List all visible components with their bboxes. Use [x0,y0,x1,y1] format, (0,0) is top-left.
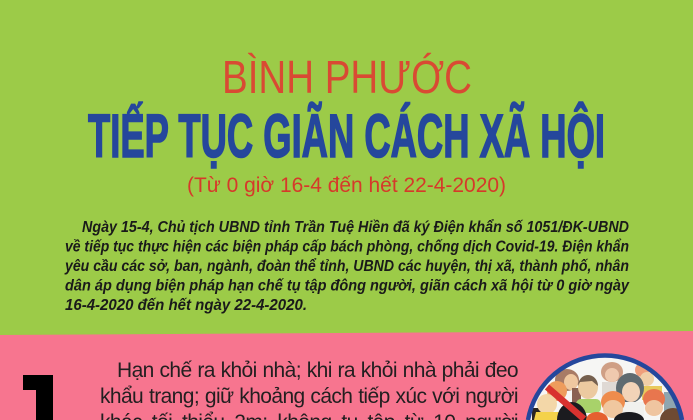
text block: intro paragraph: yêu cầu các sở, ban, ngành, đoàn thể tỉnh, UBND các huyện, thị xã, thành phố, nhân [64,258,629,275]
text block: intro paragraph [64,219,630,314]
text block: measure 1: khẩu trang; giữ khoảng cách tiếp xúc với người [100,385,518,408]
text block: measure 1: Hạn chế ra khỏi nhà; khi ra khỏi nhà phải đeo [117,359,518,382]
text block: intro paragraph: về tiếp tục thực hiện các biện pháp cấp bách phòng, chống dịch Covid-19. Điện khẩn [65,238,629,256]
subtitle: dates: (Từ 0 giờ 16-4 đến hết 22-4-2020) [187,174,506,197]
number: 1 [23,375,53,420]
text block: intro paragraph: 16-4-2020 đến hết ngày 22-4-2020. [65,297,307,314]
panel: green header background [0,0,693,334]
icon: crowd with prohibition circle [528,355,686,420]
text block: intro paragraph: Ngày 15-4, Chủ tịch UBND tỉnh Trần Tuệ Hiền đã ký Điện khẩn số 1051/ĐK-UBND [82,219,629,236]
text block: intro paragraph: dân áp dụng biện pháp hạn chế tụ tập đông người, giãn cách xã hội từ 0 giờ ngày [65,278,630,294]
panel: pink section [0,331,693,420]
heading: province name: BÌNH PHƯỚC [222,51,472,103]
text block: measure 1 [100,359,518,420]
